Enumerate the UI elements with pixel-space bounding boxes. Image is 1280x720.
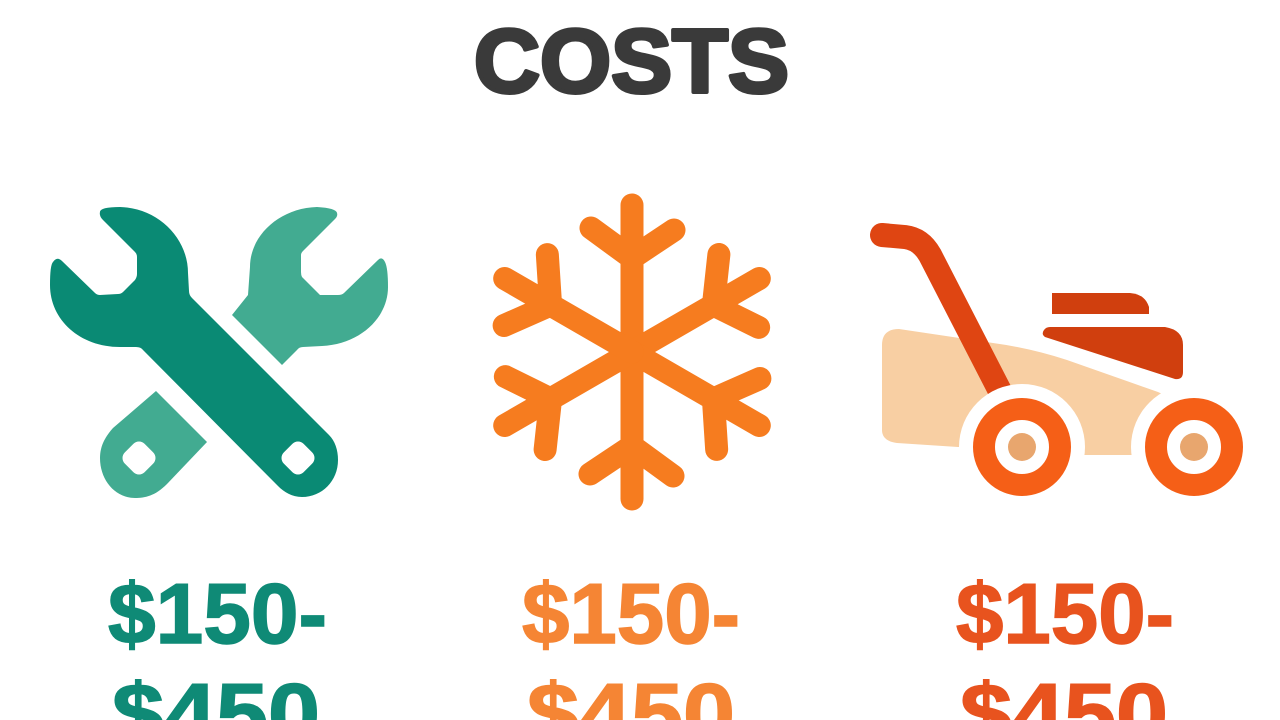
panel: lawn cost <box>882 235 1257 720</box>
icon: lawn mower <box>882 235 1257 510</box>
price: snow: $150- <box>522 567 740 662</box>
mower wheels <box>959 384 1257 510</box>
panel: snow cost <box>484 205 780 720</box>
mower handle <box>882 235 1002 395</box>
icon: snowflake <box>484 205 780 499</box>
panel: repair cost <box>50 207 388 720</box>
mower engine <box>1043 293 1183 379</box>
mower body <box>882 329 1175 455</box>
price: repair <box>108 567 327 720</box>
title: COSTS <box>474 12 789 112</box>
price: lawn: $150- <box>956 567 1174 662</box>
price: snow <box>522 567 740 720</box>
price: lawn <box>956 567 1174 720</box>
price: repair: $150- <box>108 567 327 662</box>
icon: crossed wrenches <box>50 207 388 498</box>
